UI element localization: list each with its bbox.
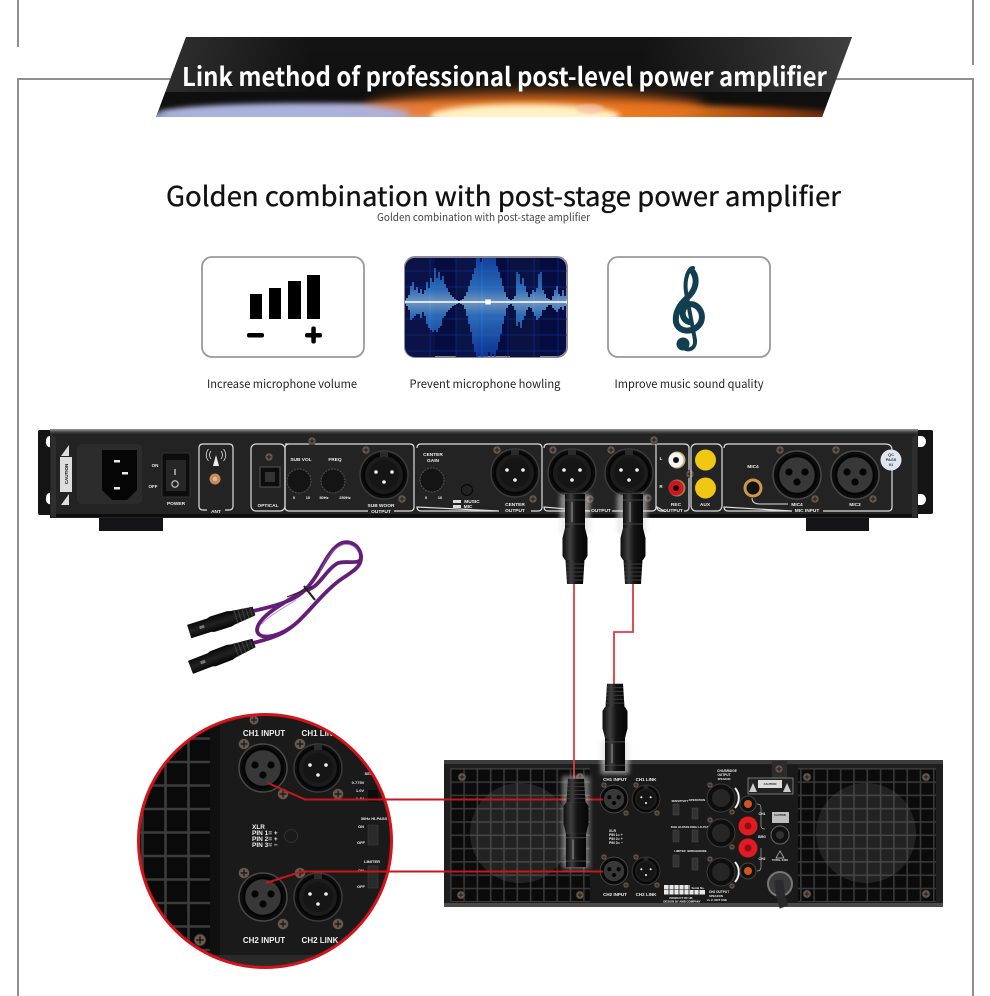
QC sticker — [880, 450, 902, 470]
red connection lines — [574, 584, 633, 780]
caption: increase microphone volume: Increase microphone volume — [207, 376, 357, 392]
center control panel: CH1 LINK — [636, 777, 657, 782]
serial label: SPEAKON — [709, 894, 723, 898]
aux section: AUX — [700, 502, 711, 508]
center section: CENTER — [505, 502, 525, 508]
inset labels — [243, 729, 339, 945]
rec output section: L — [660, 456, 663, 461]
rec output section: OUTPUT — [663, 508, 683, 514]
subwoofer section: OUTPUT — [371, 509, 391, 515]
center control panel: BRIDGEMODE — [687, 849, 707, 853]
caution labels — [60, 445, 72, 505]
sub heading: Golden combination with post-stage amplifier — [377, 210, 591, 225]
center control panel: 30Hz HI-PASS — [671, 825, 689, 829]
serial label: PRODUCT OF HK — [669, 896, 693, 900]
right fan grille — [798, 768, 936, 902]
inset labels: CH1 INPUT — [243, 729, 285, 738]
binding posts: CH2 — [758, 857, 766, 861]
center control panel: OPERATION — [689, 798, 705, 802]
mic input section: MIC3 — [849, 502, 861, 508]
binding posts: BRG — [758, 835, 766, 839]
QC sticker: QC — [888, 452, 894, 457]
grille in inset — [140, 729, 210, 953]
chart: waveform — [405, 258, 567, 357]
inset labels: PIN 1= + — [252, 830, 278, 837]
rec output section: REC — [671, 502, 682, 508]
antenna section — [199, 444, 233, 515]
purple XLR cable — [187, 542, 361, 675]
power switch — [148, 453, 190, 507]
inset switches: OFF — [357, 884, 366, 889]
optical section: OPTICAL — [257, 503, 279, 509]
serial label: DESIGN BY AMB COMPANY — [663, 900, 701, 904]
mic input section: MIC INPUT — [795, 508, 819, 514]
subwoofer section: SUB VOL — [290, 457, 312, 463]
inset switches: ON — [358, 868, 364, 873]
red callout line CH2 — [266, 872, 603, 883]
subwoofer section: 10 — [306, 495, 311, 500]
panel: increase volume icon box — [202, 257, 364, 357]
left fan grille — [450, 768, 590, 902]
binding posts: CH1 — [758, 812, 766, 816]
caution labels and power socket: CAUTION — [764, 782, 776, 786]
serial label: CH1/BRIDGE — [717, 769, 737, 773]
panel: waveform icon box — [405, 247, 567, 357]
inset switches: 0.775V — [352, 780, 365, 785]
caution labels and power socket — [748, 778, 793, 862]
center section: CENTER — [423, 452, 443, 458]
cable connector upper — [187, 603, 256, 639]
power cord — [768, 872, 792, 907]
inset labels: PIN 2= + — [252, 836, 278, 843]
inset switches: ON — [358, 824, 364, 829]
XLR plug: amplifier CH1 input — [601, 684, 629, 774]
binding posts — [738, 796, 766, 879]
caution labels: CAUTION — [64, 464, 69, 484]
serial label: Serial No. — [692, 886, 705, 890]
center section: GAIN — [427, 458, 440, 464]
inset labels: CH2 LINK — [302, 936, 339, 945]
serial label: SPEAKON — [718, 777, 731, 781]
center control panel: SENSITIVITY — [671, 799, 689, 803]
center section: MIC — [464, 504, 473, 510]
banner title text: Link method of professional post-level power amplifier — [182, 57, 828, 94]
mic input section: MIC4 — [747, 464, 759, 470]
inset labels: CH2 INPUT — [243, 936, 285, 945]
amp switches — [673, 804, 698, 870]
rear panel of processor — [38, 429, 933, 531]
power switch: ON — [152, 463, 158, 468]
center control panel: PIN 3= − — [609, 841, 623, 845]
connectors in inset — [238, 738, 344, 930]
feet — [99, 516, 869, 531]
center control panel: PIN 1= + — [609, 833, 623, 837]
inset switches: OFF — [357, 840, 366, 845]
subwoofer section: 250Hz — [339, 495, 351, 500]
caption: improve music sound quality: Improve music sound quality — [614, 376, 764, 392]
center section: 0 — [425, 495, 428, 500]
power switch: OFF — [148, 484, 158, 489]
center control panel: CH2 LINK — [636, 892, 657, 897]
caption: prevent microphone howling: Prevent microphone howling — [410, 376, 561, 392]
caution labels and power socket: TOTAL 240V — [772, 858, 788, 862]
mic input section: MIC4 — [791, 502, 803, 508]
zoomed inset circle of amplifier inputs — [137, 713, 393, 969]
rec output section — [657, 444, 694, 514]
XLR plug: output right — [617, 494, 647, 584]
subwoofer section: FREQ — [328, 457, 342, 463]
QC sticker: 01 — [889, 462, 894, 467]
center control panel: XLR — [609, 829, 616, 833]
icon: volume bars — [247, 275, 322, 344]
red callout line CH1 — [268, 783, 603, 800]
serial label — [663, 769, 737, 904]
subwoofer section: 0 — [293, 495, 296, 500]
rec output section: R — [659, 484, 663, 489]
antenna section: ANT — [211, 509, 221, 515]
inset switches: 1.0V — [356, 788, 364, 793]
serial label: CH2 OUTPUT — [709, 890, 729, 894]
center section: MUSIC — [464, 499, 480, 505]
inset switches: 1.4V — [356, 796, 364, 801]
center control panel — [590, 761, 798, 907]
center section — [417, 444, 542, 514]
inset switches: 30Hz HI-PASS — [361, 816, 388, 821]
power inlet — [77, 444, 142, 504]
panel: treble clef icon box — [608, 257, 770, 357]
caution labels and power socket: CAUTION — [774, 814, 786, 817]
center control panel: LIMITER — [674, 849, 686, 853]
main heading: Golden combination with post-stage power amplifier — [166, 175, 842, 214]
inset switches — [352, 771, 388, 889]
inset labels: XLR — [252, 824, 265, 831]
XLR plug: output left — [560, 494, 590, 584]
center control panel: CH1 INPUT — [603, 777, 627, 782]
speakon outputs — [707, 782, 739, 889]
serial label: 2+ 2- NOT USE — [707, 898, 727, 902]
aux section — [691, 444, 722, 511]
optical section — [251, 444, 285, 511]
inset labels: CH1 LINK — [302, 729, 339, 738]
subwoofer section — [285, 444, 414, 515]
mic input section — [724, 444, 902, 514]
XLR plug: amplifier second — [562, 776, 590, 869]
inset labels: PIN 3= − — [252, 842, 278, 849]
inset switches: LIMITER — [364, 859, 380, 864]
cable connector lower — [188, 636, 257, 675]
serial label: OUTPUT — [717, 773, 731, 777]
center section: OUTPUT — [505, 508, 525, 514]
icon: treble clef — [676, 268, 702, 350]
title banner — [156, 37, 852, 117]
subwoofer section: SUB WOOR — [368, 503, 395, 509]
main output section: OUTPUT — [591, 508, 611, 514]
QC sticker: PASS — [886, 457, 897, 462]
main output section — [544, 444, 656, 514]
power amplifier rear panel — [444, 760, 943, 907]
center control panel: CH2 INPUT — [603, 892, 627, 897]
subwoofer section: 50Hz — [319, 495, 329, 500]
rack ears — [38, 430, 933, 515]
center control panel: PIN 2= + — [609, 837, 623, 841]
center section: 10 — [438, 495, 443, 500]
inset switches: SENS — [365, 771, 376, 776]
center control panel: 100Hz LO-PASS — [689, 825, 711, 829]
power switch: POWER — [167, 501, 186, 507]
